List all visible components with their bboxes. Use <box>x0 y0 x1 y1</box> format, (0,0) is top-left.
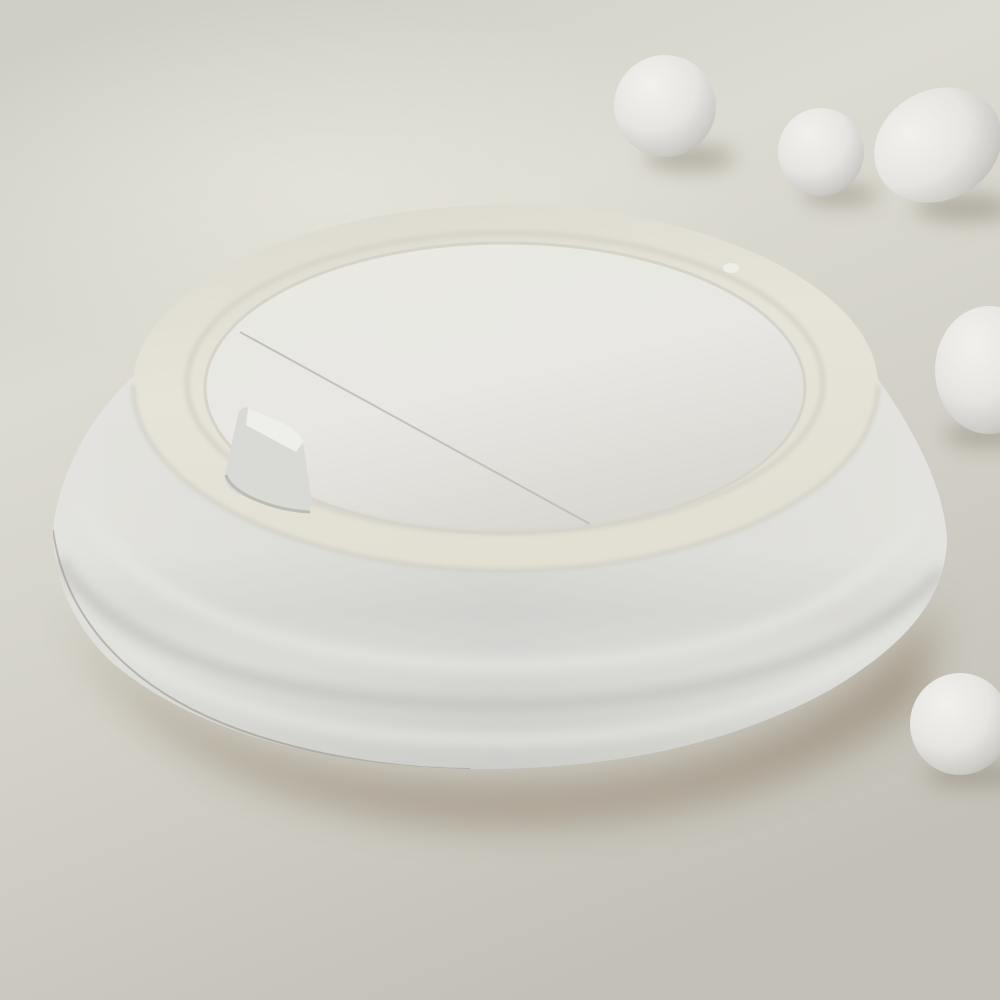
lid base flange <box>40 360 960 780</box>
egg 1 <box>614 55 716 157</box>
egg shadow cluster <box>645 146 1000 787</box>
inner recessed disc <box>205 243 805 533</box>
group: lid <box>40 205 960 780</box>
eggs <box>614 55 1000 787</box>
egg 4 <box>935 306 1000 434</box>
sip tab <box>225 407 312 513</box>
egg 2 <box>778 108 864 196</box>
egg 5 <box>910 673 1000 775</box>
tear line <box>240 332 590 524</box>
shadow under lid <box>70 600 940 822</box>
lid top ring <box>133 205 878 570</box>
egg 3 <box>854 65 1000 225</box>
small hole <box>723 263 739 273</box>
